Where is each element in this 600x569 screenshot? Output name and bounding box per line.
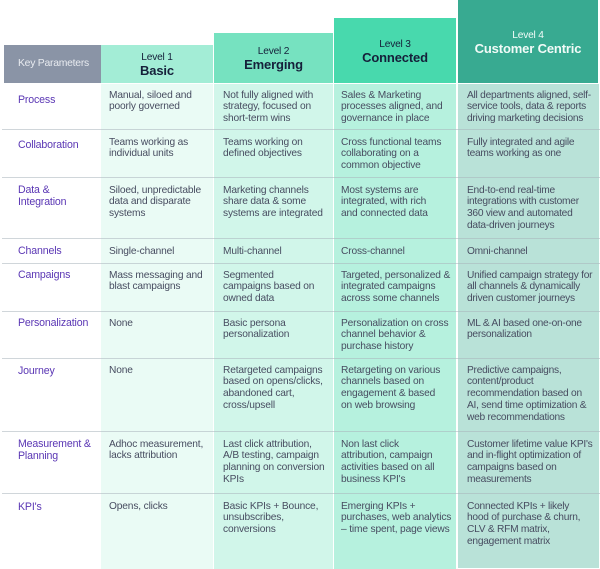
KPI's level 3: – time spent, page views [341, 524, 450, 535]
KPI's level 3: Emerging KPIs + [341, 500, 415, 512]
KPI's level 4: CLV & RFM matrix, [467, 524, 550, 535]
Data level 2: Marketing channels [223, 184, 309, 196]
header: Level 4 Customer Centric: Customer Centric [475, 41, 581, 56]
Collaboration level 2: defined objectives [223, 148, 302, 159]
row label: Channels: Channels [18, 245, 62, 257]
Campaigns level 3: integrated campaigns [341, 281, 435, 292]
Collaboration level 4 [467, 136, 574, 159]
header: Level 2 Emerging [214, 33, 333, 83]
Campaigns level 2: Segmented [223, 270, 274, 280]
header: Level 2 Emerging: Level 2 [258, 46, 289, 57]
Process level 3: processes aligned, and [341, 101, 442, 112]
Collaboration level 3: collaborating on a [341, 148, 419, 159]
row label: Journey: Journey [18, 365, 55, 377]
Campaigns level 3 [341, 270, 450, 304]
KPI's level 2 [223, 500, 318, 535]
Campaigns level 1 [109, 270, 203, 292]
Data level 4: data-driven journeys [467, 220, 554, 231]
Measurement level 2: planning on conversion [223, 462, 324, 473]
Campaigns level 4: driven customer journeys [467, 293, 575, 304]
header: Key Parameters: Key Parameters [18, 58, 89, 69]
Process level 4: service tools, data & reports [467, 101, 586, 112]
KPI's level 4 [467, 500, 580, 547]
header: Level 4 Customer Centric [458, 0, 598, 83]
Journey level 3 [341, 364, 440, 411]
Collaboration level 3: Cross functional teams [341, 136, 441, 148]
Process level 4: All departments aligned, self- [467, 90, 591, 100]
Measurement level 1 [109, 438, 203, 461]
Measurement level 3 [341, 438, 434, 485]
row label: KPI's: KPI's [18, 501, 42, 513]
Journey level 2: based on opens/clicks, [223, 376, 323, 387]
Measurement level 2: Last click attribution, [223, 438, 312, 450]
Campaigns level 1: blast campaigns [109, 281, 180, 292]
Journey level 4: content/product [467, 376, 533, 387]
Collaboration level 3 [341, 136, 442, 171]
KPI's level 1: Opens, clicks [109, 500, 168, 512]
Measurement level 1: Adhoc measurement, [109, 438, 203, 450]
KPI's level 3 [341, 500, 451, 535]
Journey level 4: web recommendations [467, 412, 565, 422]
Personalization level 1: None [109, 318, 133, 328]
Process level 1 [109, 90, 192, 112]
Campaigns level 4: Unified campaign strategy for [467, 270, 592, 280]
Data level 2: share data & some [223, 196, 306, 207]
Campaigns level 1: Mass messaging and [109, 270, 203, 280]
Measurement level 2: KPIs [223, 474, 244, 485]
Journey level 3: on web browsing [341, 400, 415, 411]
Measurement level 4: Customer lifetime value KPI's [467, 438, 592, 450]
KPI's level 2: conversions [223, 524, 276, 535]
KPI's level 4: Connected KPIs + likely [467, 500, 569, 512]
header: Level 2 Emerging: Emerging [244, 57, 303, 72]
Campaigns level 3: across some channels [341, 293, 439, 304]
Channels level 1: Single-channel [109, 246, 174, 256]
KPI's level 2: unsubscribes, [223, 512, 284, 523]
Collaboration level 1 [109, 136, 188, 159]
Campaigns level 4 [467, 270, 592, 304]
Collaboration level 4: teams working as one [467, 148, 561, 159]
Data level 2 [223, 184, 323, 219]
column background: Level 4 [458, 84, 599, 568]
Process level 3: Sales & Marketing [341, 90, 421, 100]
Data level 3 [341, 184, 428, 219]
header: Level 4 Customer Centric: Level 4 [512, 30, 544, 41]
Channels level 3: Cross-channel [341, 246, 405, 256]
Journey level 2: abandoned cart, [223, 388, 294, 399]
row label: Measurement & Planning [18, 438, 91, 462]
Data level 3: and connected data [341, 208, 428, 219]
Journey level 3: channels based on [341, 376, 424, 387]
header: Level 1 Basic: Level 1 [141, 52, 173, 63]
KPI's level 2: Basic KPIs + Bounce, [223, 500, 318, 512]
KPI's level 4: engagement matrix [467, 536, 550, 547]
Data level 4 [467, 184, 579, 231]
header: Key Parameters [4, 45, 101, 83]
Collaboration level 2: Teams working on [223, 136, 303, 148]
Personalization level 3: Personalization on cross [341, 318, 448, 328]
Journey level 2 [223, 364, 323, 411]
Process level 4 [467, 90, 591, 124]
Personalization level 3 [341, 318, 448, 352]
Campaigns level 3: Targeted, personalized & [341, 270, 450, 280]
Data level 1: systems [109, 208, 145, 219]
row label: Personalization: Personalization [18, 317, 88, 329]
row label: Campaigns: Campaigns [18, 269, 70, 281]
Measurement level 2 [223, 438, 324, 485]
Measurement level 2: A/B testing, campaign [223, 450, 319, 461]
Measurement level 3: attribution, campaign [341, 450, 432, 461]
Personalization level 2: Basic persona [223, 318, 286, 328]
Data level 4: End-to-end real-time [467, 184, 555, 196]
Process level 1: Manual, siloed and [109, 90, 192, 100]
row label: Data & Integration: Data & [18, 184, 50, 196]
Personalization level 3: purchase history [341, 341, 413, 352]
row label: Data & Integration [18, 184, 66, 208]
Journey level 3: Retargeting on various [341, 364, 440, 376]
Collaboration level 3: common objective [341, 160, 421, 171]
Campaigns level 4: all channels & dynamically [467, 281, 580, 292]
Process level 2: short-term wins [223, 113, 290, 124]
Journey level 4: recommendation based on [467, 388, 582, 399]
Collaboration level 1: individual units [109, 148, 173, 159]
Process level 2 [223, 90, 313, 124]
Data level 3: Most systems are [341, 184, 418, 196]
row label: Data & Integration: Integration [18, 196, 66, 208]
Campaigns level 2: campaigns based on [223, 281, 314, 292]
Journey level 1: None [109, 364, 133, 376]
header: Level 3 Connected: Connected [362, 50, 428, 65]
Measurement level 3: business KPI's [341, 474, 405, 485]
row label: Collaboration: Collaboration [18, 139, 78, 151]
Channels level 2: Multi-channel [223, 246, 282, 256]
column background: Level 2 [214, 84, 333, 569]
Journey level 4: AI, send time optimization & [467, 400, 586, 411]
header: Level 1 Basic: Basic [140, 63, 174, 78]
Process level 2: strategy, focused on [223, 101, 311, 112]
Data level 1: Siloed, unpredictable [109, 184, 201, 196]
Process level 4: driving marketing decisions [467, 113, 583, 124]
Personalization level 4: ML & AI based one-on-one [467, 318, 582, 328]
Collaboration level 4: Fully integrated and agile [467, 136, 574, 148]
KPI's level 4: hood of purchase & churn, [467, 512, 580, 523]
Process level 3 [341, 90, 442, 124]
Personalization level 4: personalization [467, 329, 532, 340]
Personalization level 4 [467, 318, 582, 340]
Measurement level 1: lacks attribution [109, 450, 177, 461]
Journey level 4 [467, 364, 586, 422]
Measurement level 4 [467, 438, 592, 485]
column background: Level 1 [101, 84, 213, 569]
Journey level 4: Predictive campaigns, [467, 364, 561, 376]
Channels level 4: Omni-channel [467, 246, 527, 256]
Journey level 2: Retargeted campaigns [223, 364, 323, 376]
header: Level 3 Connected: Level 3 [379, 39, 411, 50]
Campaigns level 2: owned data [223, 293, 274, 304]
Data level 3: integrated, with rich [341, 196, 426, 207]
row label: Measurement & Planning: Planning [18, 450, 58, 462]
Measurement level 4: campaigns based on [467, 462, 557, 473]
row label: Measurement & Planning: Measurement & [18, 438, 91, 450]
Data level 1 [109, 184, 201, 219]
header: Level 3 Connected [334, 18, 456, 83]
Process level 2: Not fully aligned with [223, 90, 313, 100]
Data level 4: integrations with customer [467, 196, 579, 207]
Personalization level 3: channel behavior & [341, 329, 426, 340]
Journey level 2: cross/upsell [223, 400, 275, 411]
Process level 1: poorly governed [109, 101, 180, 112]
Personalization level 2 [223, 318, 289, 340]
header: Level 1 Basic [101, 45, 213, 83]
Data level 4: 360 view and automated [467, 208, 573, 219]
Measurement level 3: Non last click [341, 438, 399, 450]
Measurement level 3: activities based on all [341, 462, 434, 473]
Data level 2: systems are integrated [223, 208, 323, 219]
Journey level 3: engagement & based [341, 388, 435, 399]
column background: Level 3 [334, 84, 456, 569]
Measurement level 4: measurements [467, 474, 531, 485]
Collaboration level 2 [223, 136, 303, 159]
Collaboration level 1: Teams working as [109, 136, 188, 148]
KPI's level 3: purchases, web analytics [341, 512, 451, 523]
Personalization level 2: personalization [223, 329, 289, 340]
Data level 1: data and disparate [109, 196, 191, 207]
Measurement level 4: and in-flight optimization of [467, 450, 581, 461]
Process level 3: governance in place [341, 113, 429, 124]
Campaigns level 2 [223, 270, 314, 304]
row label: Process: Process [18, 94, 55, 106]
